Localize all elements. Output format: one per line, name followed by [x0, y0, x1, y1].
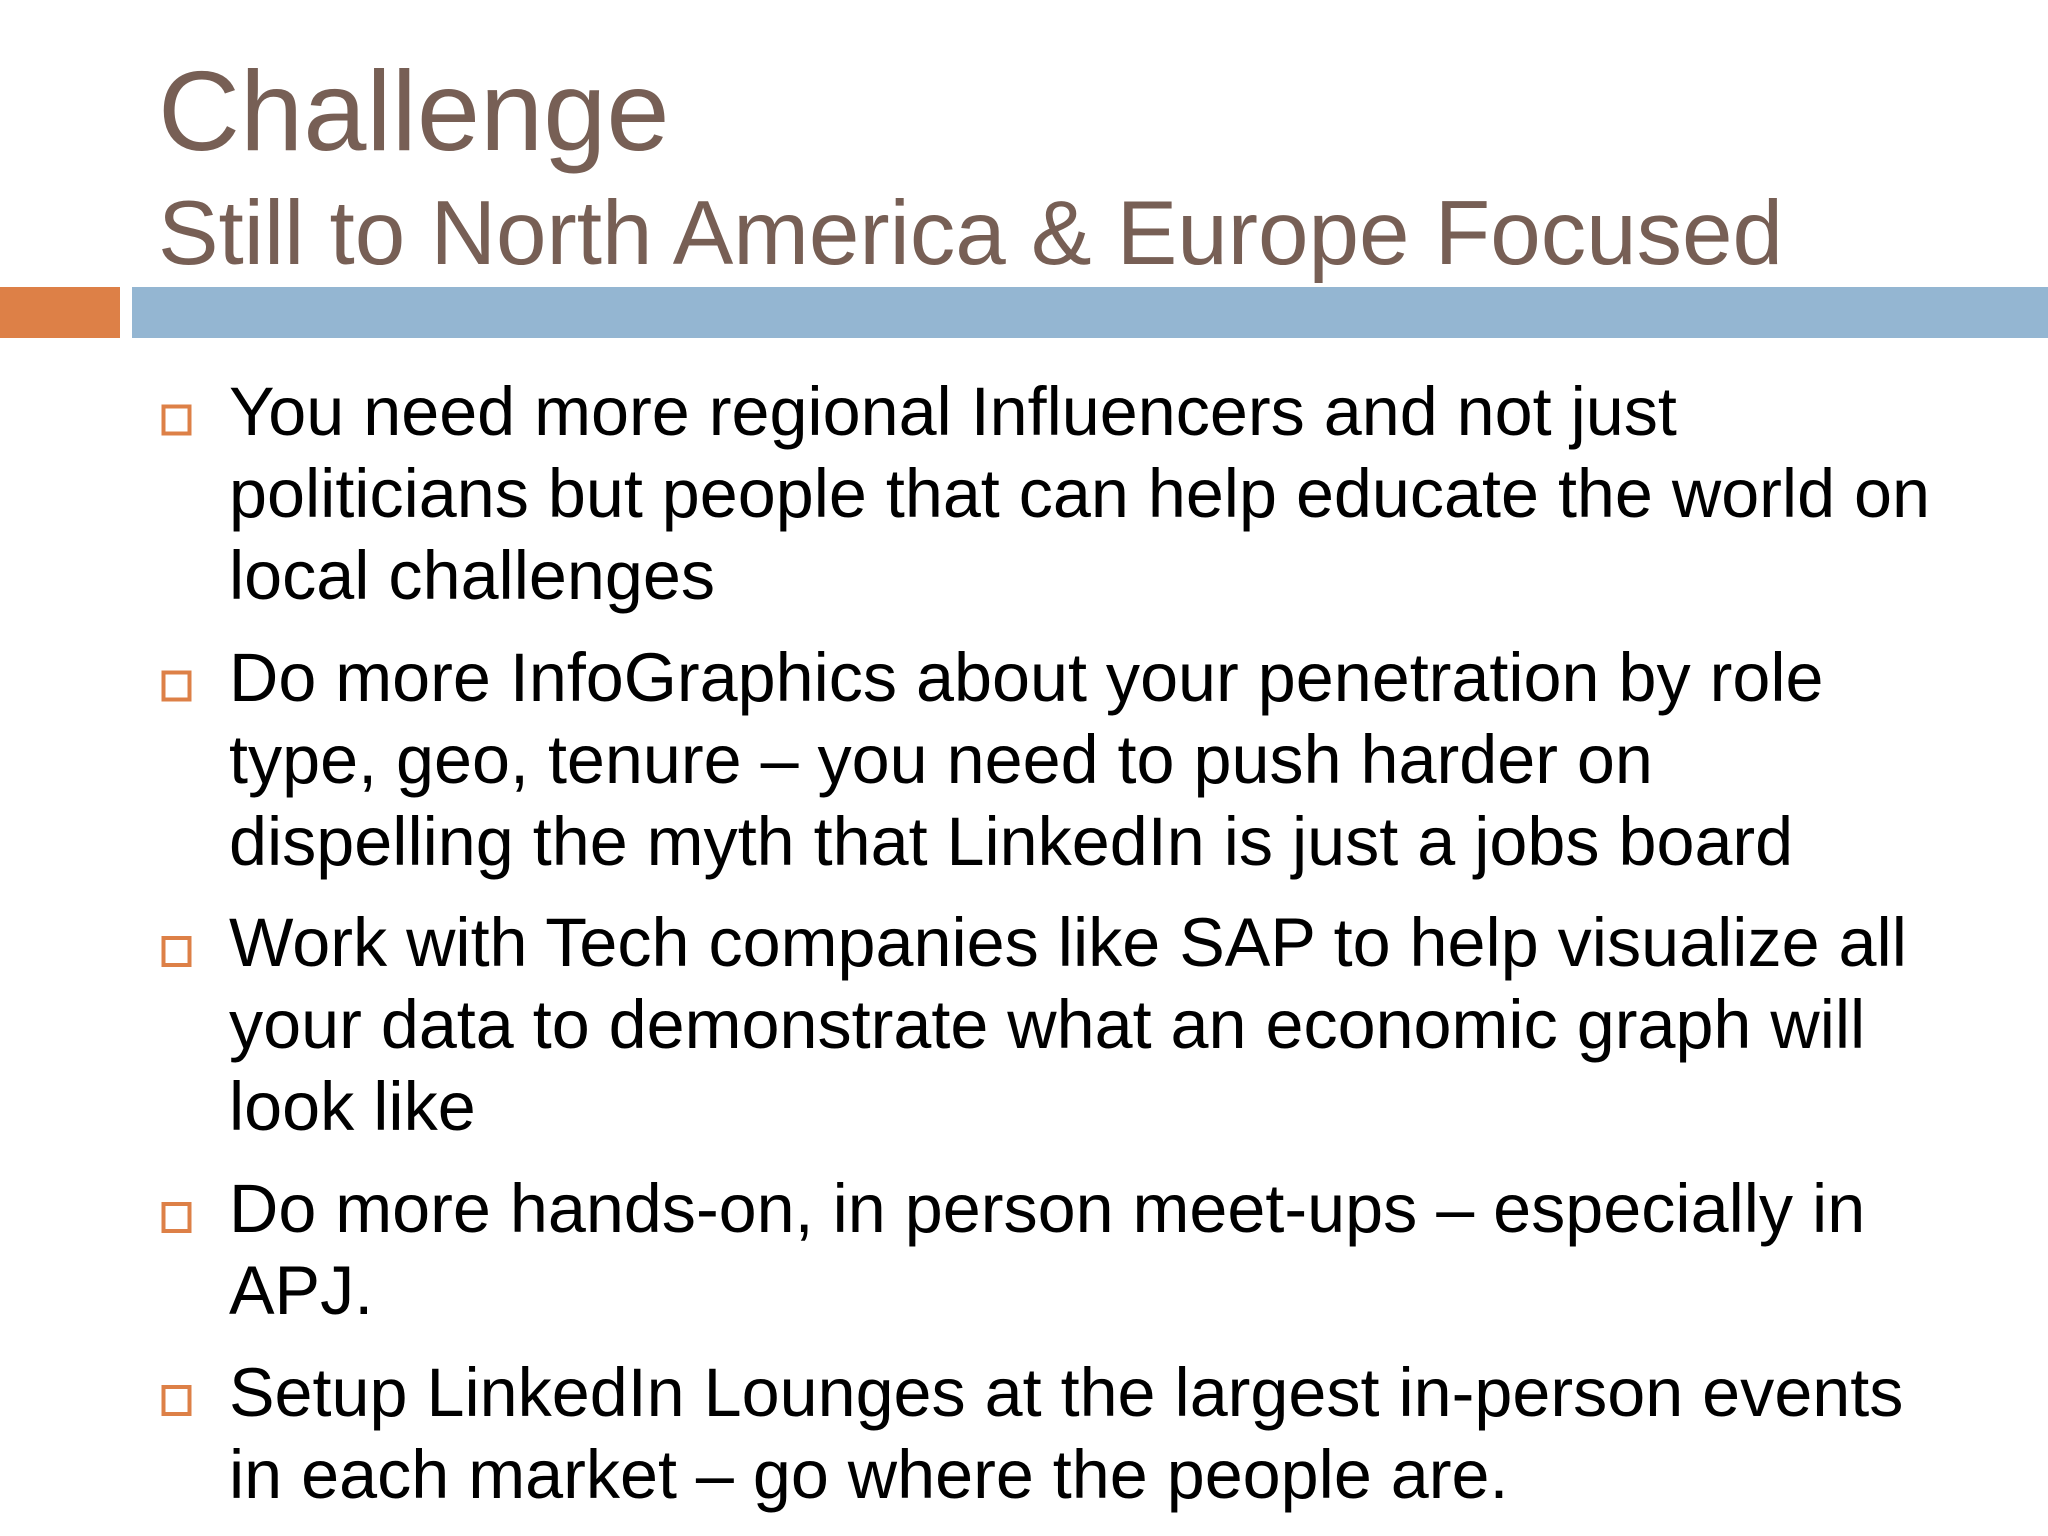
bullet 1 [164, 374, 1930, 614]
bullet 4 [164, 1171, 1865, 1329]
accent bar: orange [0, 287, 120, 338]
accent bar: blue [132, 287, 2048, 338]
bullet 2: type, geo, tenure – you need to push harder on [229, 722, 1653, 798]
bullet 3 [164, 905, 1907, 1145]
bullet 5: Setup LinkedIn Lounges at the largest in-person events [229, 1355, 1903, 1431]
bullet 2: dispelling the myth that LinkedIn is just a jobs board [229, 804, 1793, 880]
bullet 2 [164, 640, 1823, 880]
bullet 3: look like [229, 1069, 476, 1145]
bullet 3: your data to demonstrate what an economic graph will [229, 987, 1865, 1063]
bullet list [164, 374, 1930, 1513]
subtitle: Still to North America & Europe Focused [158, 183, 1783, 284]
bullet 5: in each market – go where the people are. [229, 1437, 1508, 1513]
title: Challenge [158, 48, 670, 175]
bullet 1: local challenges [229, 538, 715, 614]
bullet 1: politicians but people that can help educate the world on [229, 456, 1930, 532]
bullet 4: APJ. [229, 1253, 373, 1329]
bullet 3: Work with Tech companies like SAP to help visualize all [229, 905, 1907, 981]
bullet 1: You need more regional Influencers and not just [229, 374, 1677, 450]
bullet 2: Do more InfoGraphics about your penetration by role [229, 640, 1823, 716]
bullet 5 [164, 1355, 1903, 1513]
bullet 4: Do more hands-on, in person meet-ups – especially in [229, 1171, 1865, 1247]
